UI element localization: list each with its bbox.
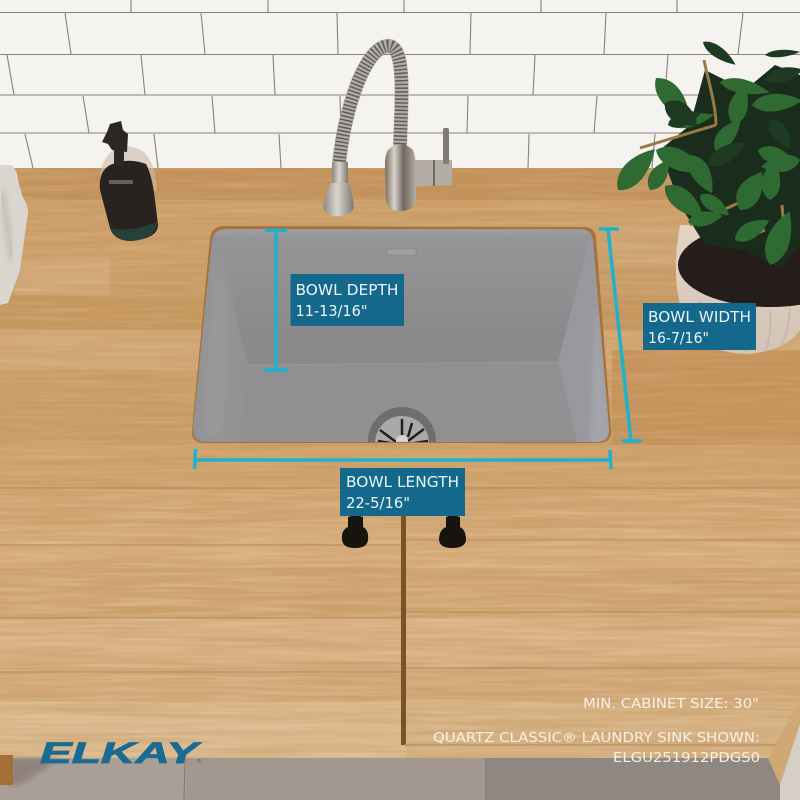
plant pot (676, 223, 800, 354)
drain (368, 407, 436, 442)
cabinet doors (0, 488, 800, 759)
sink cutout rim (192, 226, 611, 443)
cabinet side panel (768, 700, 800, 800)
label: bowl length (340, 468, 465, 516)
logo: Elkay: ELKAY (40, 737, 203, 770)
label: bowl width: 16-7/16" (648, 329, 709, 347)
cabinet knobs (342, 516, 466, 548)
faucet body (385, 144, 416, 211)
soil (678, 223, 800, 307)
label: bowl length: BOWL LENGTH (346, 473, 459, 491)
dimension line: bowl width (599, 229, 642, 441)
sink logo plate (387, 249, 416, 255)
dimension line: bowl depth (264, 230, 288, 370)
handle (407, 128, 452, 187)
tile wall (0, 0, 800, 170)
label: bowl depth: 11-13/16" (296, 302, 368, 320)
faucet (323, 46, 452, 216)
label: bowl length: 22-5/16" (346, 494, 410, 512)
cabinet size and model note: ELGU251912PDGS0 (613, 750, 760, 766)
sink (192, 226, 611, 443)
towel (0, 165, 28, 305)
cabinet size and model note: MIN. CABINET SIZE: 30" (583, 696, 759, 712)
label: bowl width (643, 303, 756, 350)
soap bottle (100, 121, 158, 241)
sink basin (192, 229, 610, 442)
label: bowl width: BOWL WIDTH (648, 308, 751, 326)
cabinet size and model note (433, 696, 760, 766)
dimension line: bowl length (194, 449, 611, 469)
label: bowl depth (290, 274, 404, 326)
plant foliage (610, 37, 800, 269)
spring gooseneck (339, 46, 402, 165)
spray head (323, 162, 354, 216)
logo: Elkay (40, 737, 203, 770)
cabinet size and model note: QUARTZ CLASSIC® LAUNDRY SINK SHOWN: (433, 730, 760, 746)
logo: Elkay: ® (197, 758, 202, 765)
wooden countertop (0, 168, 800, 488)
label: bowl depth: BOWL DEPTH (296, 281, 398, 299)
floor (0, 755, 800, 800)
